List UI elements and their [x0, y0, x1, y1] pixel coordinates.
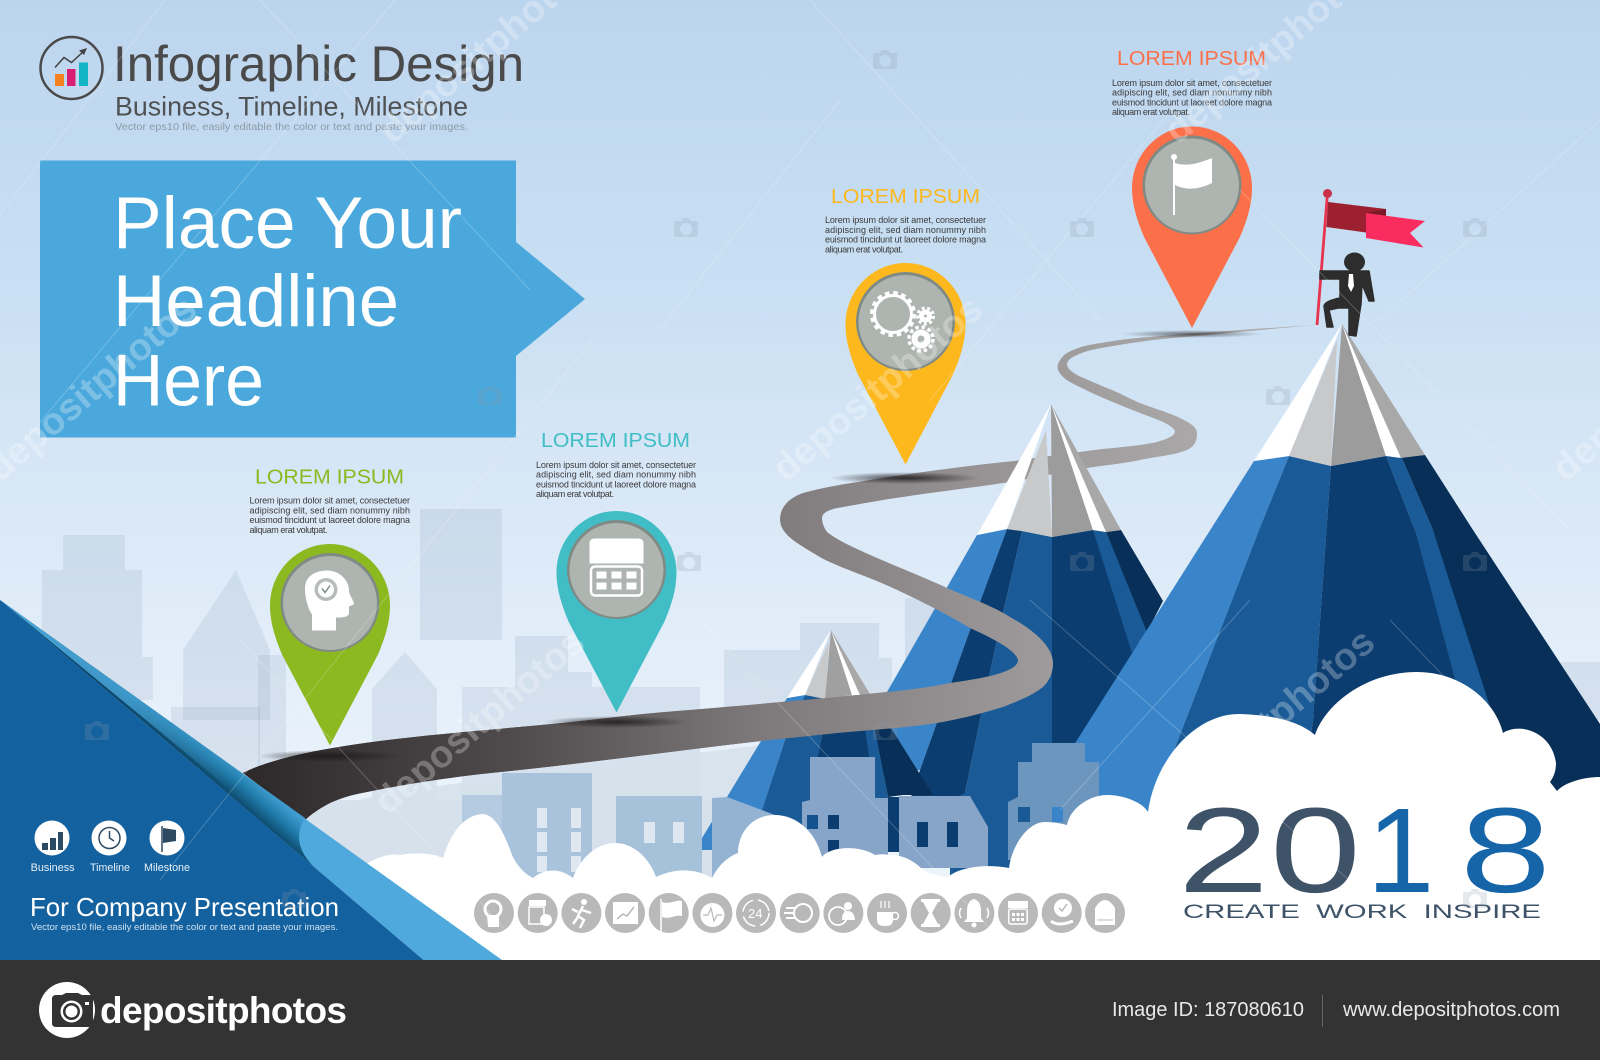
milestone 2 text: teal: adipiscing elit, sed diam nonummy nibh	[536, 470, 696, 480]
pin shadows on road	[258, 330, 1262, 762]
year 2018: 1	[1367, 782, 1434, 918]
icon: timeline	[92, 820, 126, 856]
watermark text: depositphotos	[765, 288, 991, 490]
bottom-left blue triangle panel	[0, 600, 424, 960]
label: business: Business	[31, 862, 75, 874]
icon: milestone flag	[150, 820, 184, 856]
icon: business	[34, 820, 70, 856]
icon 1: head	[474, 893, 514, 933]
milestone 2 text: teal: Lorem ipsum dolor sit amet, consectetuer	[536, 460, 696, 470]
icon 15: pod	[1085, 893, 1125, 933]
mountain: tall peak	[1020, 324, 1600, 880]
headline arrow banner	[40, 160, 585, 438]
flag pole	[1317, 189, 1332, 325]
milestone 2 pin: teal calendar	[556, 511, 676, 712]
headline line 1: Place Your	[113, 183, 462, 264]
year 2018	[1178, 782, 1551, 918]
icon: calendar	[590, 538, 644, 596]
footer logo wordmark: depositphotos	[100, 990, 347, 1031]
milestone 1 text: green: adipiscing elit, sed diam nonummy nibh	[250, 506, 410, 516]
milestone 4 text: orange: aliquam erat volutpat.	[1112, 107, 1190, 117]
icon row	[474, 893, 1125, 933]
climbing figure	[1320, 252, 1374, 336]
icon 4: chart	[605, 893, 645, 933]
icon: gears	[872, 293, 934, 351]
title: Infographic Design	[113, 36, 524, 92]
lower city haze	[300, 740, 800, 880]
icon 12: bell	[954, 893, 994, 933]
milestone 2 text: teal: aliquam erat volutpat.	[536, 489, 614, 499]
milestone 3 text: yellow: euismod tincidunt ut laoreet dolore magna	[825, 234, 986, 244]
title note: Vector eps10 file, easily editable the color or text and paste your images.	[115, 121, 468, 133]
mountain: small peak	[702, 630, 933, 870]
milestone 1 text: green: Lorem ipsum dolor sit amet, consectetuer	[250, 496, 410, 506]
milestone 3 text: yellow: Lorem ipsum dolor sit amet, consectetuer	[825, 215, 986, 225]
white clouds	[366, 672, 1600, 960]
panel heading: For Company Presentation	[30, 892, 339, 922]
logo icon	[40, 37, 102, 99]
milestone 3 text: yellow	[825, 186, 986, 254]
milestone 4 pin: orange flag	[1132, 126, 1252, 328]
milestone 4 text: orange	[1112, 48, 1272, 117]
icon 14: clock in hand	[1042, 893, 1082, 933]
milestone 1 pin: green head	[270, 544, 390, 746]
image id: Image ID: 187080610	[1112, 999, 1304, 1021]
foreground blue buildings	[462, 743, 1099, 880]
icon: flag	[1171, 154, 1212, 215]
watermark text: depositphotos	[367, 621, 593, 823]
icon 7: 24 hours	[736, 893, 776, 933]
icon: head with clock	[305, 570, 354, 630]
icon 8: speed check	[780, 893, 820, 933]
milestone 4 text: orange: Lorem ipsum dolor sit amet, consectetuer	[1112, 78, 1272, 88]
milestone 4 text: orange: euismod tincidunt ut laoreet dolore magna	[1112, 98, 1272, 108]
milestone 3 pin: yellow gears	[846, 263, 966, 464]
milestone 1 text: green: LOREM IPSUM	[255, 466, 404, 488]
milestone 3 text: yellow: LOREM IPSUM	[831, 186, 980, 208]
milestone 2 text: teal	[536, 430, 696, 499]
icon 11: hourglass	[911, 893, 951, 933]
milestone 4 text: orange: LOREM IPSUM	[1117, 48, 1266, 70]
milestone 2 text: teal: LOREM IPSUM	[541, 430, 690, 452]
red flag	[1326, 202, 1425, 248]
icon 10: coffee	[867, 893, 907, 933]
footer bar	[0, 960, 1600, 1060]
year 2018: 8	[1460, 783, 1551, 918]
middle peak snowcap	[977, 404, 1121, 537]
icon 7: 24 hours: 24	[748, 906, 762, 921]
watermark cameras	[85, 50, 1487, 908]
year 2018: 0	[1270, 783, 1361, 918]
panel note: Vector eps10 file, easily editable the color or text and paste your images.	[31, 922, 338, 933]
milestone 1 text: green	[250, 466, 410, 535]
icon 5: flag	[649, 893, 689, 933]
subtitle: Business, Timeline, Milestone	[115, 92, 468, 122]
tall peak snowcap	[1254, 324, 1425, 466]
milestone 1 text: green: aliquam erat volutpat.	[250, 525, 328, 535]
milestone 3 text: yellow: adipiscing elit, sed diam nonummy nibh	[825, 225, 986, 235]
background city skyline	[42, 509, 1600, 880]
tagline: CREATE WORK INSPIRE	[1183, 901, 1541, 923]
label: timeline: Timeline	[90, 862, 130, 874]
milestone 4 text: orange: adipiscing elit, sed diam nonummy nibh	[1112, 88, 1272, 98]
milestone 3 text: yellow: aliquam erat volutpat.	[825, 244, 903, 254]
icon 13: calendar	[998, 893, 1038, 933]
website address: www.depositphotos.com	[1342, 999, 1560, 1021]
icon 6: stopwatch	[692, 893, 732, 933]
road over the mountains	[243, 500, 1053, 820]
folded corner light band	[0, 600, 502, 960]
headline line 3: Here	[113, 340, 264, 422]
watermark text	[0, 0, 1600, 823]
headline line 2: Headline	[113, 261, 399, 342]
road behind the mountains	[243, 325, 1315, 820]
milestone 2 text: teal: euismod tincidunt ut laoreet dolore magna	[536, 480, 696, 490]
year 2018: 2	[1178, 783, 1269, 918]
footer logo icon	[39, 982, 95, 1038]
icon 9: clock and person	[823, 893, 863, 933]
icon 2: calendar clock	[518, 893, 558, 933]
building windows	[537, 807, 1063, 872]
small peak snowcap	[787, 630, 870, 699]
label: milestone: Milestone	[144, 862, 190, 874]
milestone 1 text: green: euismod tincidunt ut laoreet dolore magna	[250, 515, 410, 525]
icon 3: runner	[561, 893, 601, 933]
mountain: middle peak	[860, 404, 1163, 880]
watermark text: depositphotos	[1157, 621, 1383, 823]
climber with flag on the summit	[1317, 189, 1425, 336]
